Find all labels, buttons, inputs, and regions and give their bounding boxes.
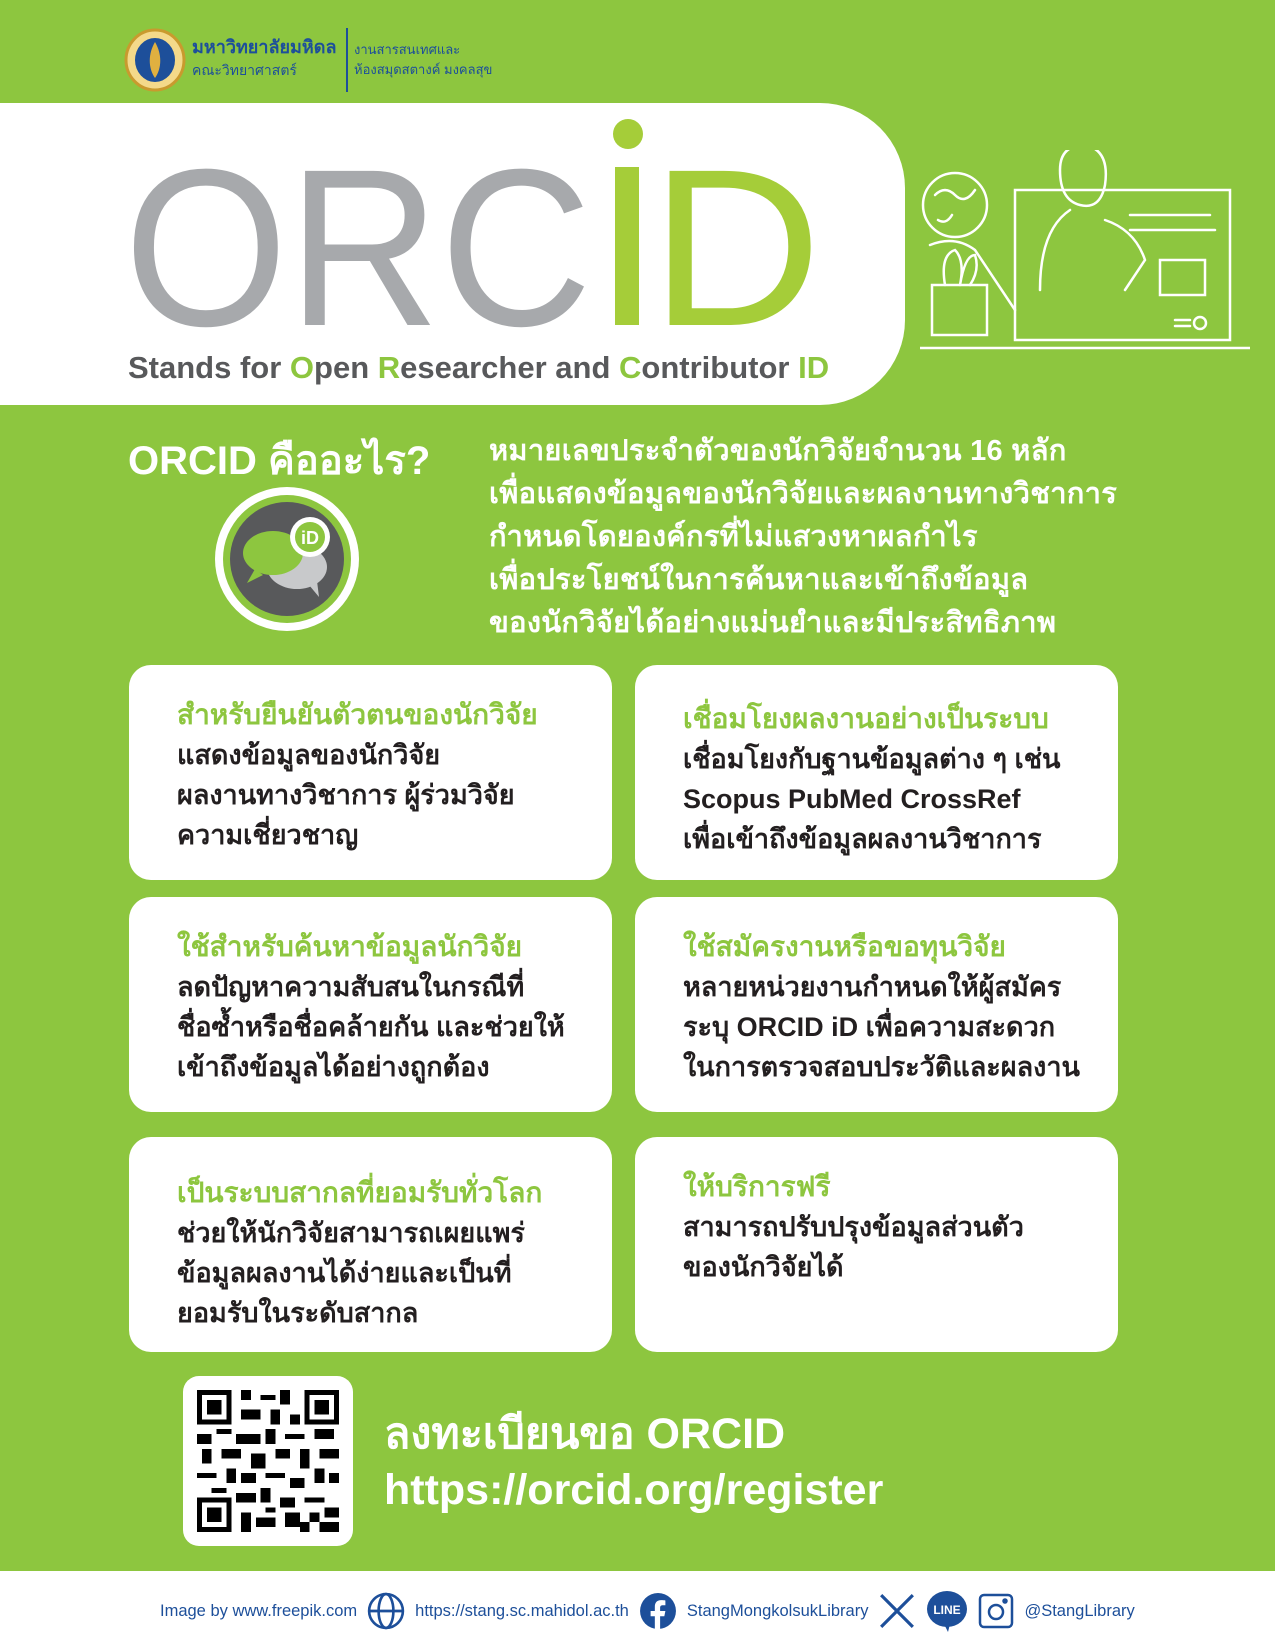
card: search: ชื่อซ้ำหรือชื่อคล้ายกัน และช่วยให้ — [177, 1012, 565, 1042]
QR code — [183, 1376, 353, 1546]
card: identity: แสดงข้อมูลของนักวิจัย — [177, 740, 440, 770]
card: global — [129, 1137, 612, 1352]
heading: what is ORCID: ORCID คืออะไร? — [128, 439, 430, 483]
card: search: ใช้สำหรับค้นหาข้อมูลนักวิจัย — [177, 931, 522, 962]
library name: งานสารสนเทศและ — [354, 42, 460, 57]
icon: facebook — [640, 1593, 676, 1629]
card: free: ให้บริการฟรี — [683, 1171, 831, 1202]
card: free: ของนักวิจัยได้ — [683, 1252, 844, 1282]
card: search: เข้าถึงข้อมูลได้อย่างถูกต้อง — [177, 1052, 490, 1082]
library name: ห้องสมุดสตางค์ มงคลสุข — [354, 62, 492, 77]
card: global: ยอมรับในระดับสากล — [177, 1298, 418, 1328]
icon: LINE — [927, 1591, 967, 1632]
description paragraph: เพื่อประโยชน์ในการค้นหาและเข้าถึงข้อมูล — [489, 564, 1028, 596]
library name — [354, 42, 492, 78]
footer — [0, 1571, 1275, 1650]
register call to action — [384, 1410, 883, 1514]
icon: instagram — [978, 1594, 1014, 1628]
register call to action: ลงทะเบียนขอ ORCID — [384, 1410, 785, 1458]
university name: คณะวิทยาศาสตร์ — [192, 62, 297, 78]
card: applications — [635, 897, 1118, 1112]
card: global: ข้อมูลผลงานได้ง่ายและเป็นที่ — [177, 1258, 512, 1288]
card: global: ช่วยให้นักวิจัยสามารถเผยแพร่ — [177, 1218, 525, 1248]
card: linking: เชื่อมโยงผลงานอย่างเป็นระบบ — [683, 703, 1049, 734]
icon: ORCID chat bubbles: iD — [301, 528, 319, 548]
card: applications: หลายหน่วยงานกำหนดให้ผู้สมัคร — [683, 972, 1061, 1002]
description paragraph: กำหนดโดยองค์กรที่ไม่แสวงหาผลกำไร — [489, 521, 978, 553]
icon: ORCID chat bubbles — [215, 487, 359, 631]
ORCID wordmark: ORC — [124, 123, 592, 373]
subtitle: Stands for Open Researcher and Contributor ID — [128, 350, 829, 385]
footer: StangMongkolsukLibrary — [687, 1602, 868, 1620]
card: linking: Scopus PubMed CrossRef — [683, 784, 1021, 814]
card: identity: สำหรับยืนยันตัวตนของนักวิจัย — [177, 699, 538, 730]
card: identity — [129, 665, 612, 880]
icon: X — [880, 1594, 914, 1628]
description paragraph — [489, 435, 1117, 639]
ORCID wordmark: D — [650, 123, 822, 373]
card: free — [635, 1137, 1118, 1352]
footer: Image by www.freepik.com — [160, 1602, 357, 1620]
title panel — [0, 103, 905, 405]
card: identity: ผลงานทางวิชาการ ผู้ร่วมวิจัย — [177, 780, 515, 810]
illustration: researcher with screen — [920, 150, 1250, 350]
university name: มหาวิทยาลัยมหิดล — [192, 37, 336, 57]
card: global: เป็นระบบสากลที่ยอมรับทั่วโลก — [177, 1177, 542, 1208]
footer: @StangLibrary — [1024, 1602, 1135, 1620]
card: applications: ระบุ ORCID iD เพื่อความสะดวก — [683, 1012, 1055, 1042]
card: applications: ในการตรวจสอบประวัติและผลงาน — [683, 1052, 1080, 1082]
description paragraph: ของนักวิจัยได้อย่างแม่นยำและมีประสิทธิภาพ — [489, 607, 1056, 639]
icon: LINE: LINE — [934, 1603, 961, 1617]
footer: https://stang.sc.mahidol.ac.th — [415, 1602, 629, 1620]
header logo — [124, 28, 492, 92]
card: free: สามารถปรับปรุงข้อมูลส่วนตัว — [683, 1212, 1024, 1242]
card: linking: เพื่อเข้าถึงข้อมูลผลงานวิชาการ — [683, 824, 1041, 854]
card: linking — [635, 665, 1118, 880]
card: identity: ความเชี่ยวชาญ — [177, 820, 358, 850]
university name — [192, 37, 336, 78]
register call to action: https://orcid.org/register — [384, 1466, 883, 1514]
card: search: ลดปัญหาความสับสนในกรณีที่ — [177, 972, 524, 1002]
card: search — [129, 897, 612, 1112]
card: linking: เชื่อมโยงกับฐานข้อมูลต่าง ๆ เช่น — [683, 744, 1060, 774]
icon: globe — [368, 1592, 404, 1630]
description paragraph: หมายเลขประจำตัวของนักวิจัยจำนวน 16 หลัก — [489, 435, 1067, 467]
card: applications: ใช้สมัครงานหรือขอทุนวิจัย — [683, 931, 1006, 962]
icon: university seal — [124, 28, 186, 92]
description paragraph: เพื่อแสดงข้อมูลของนักวิจัยและผลงานทางวิชาการ — [489, 478, 1117, 510]
